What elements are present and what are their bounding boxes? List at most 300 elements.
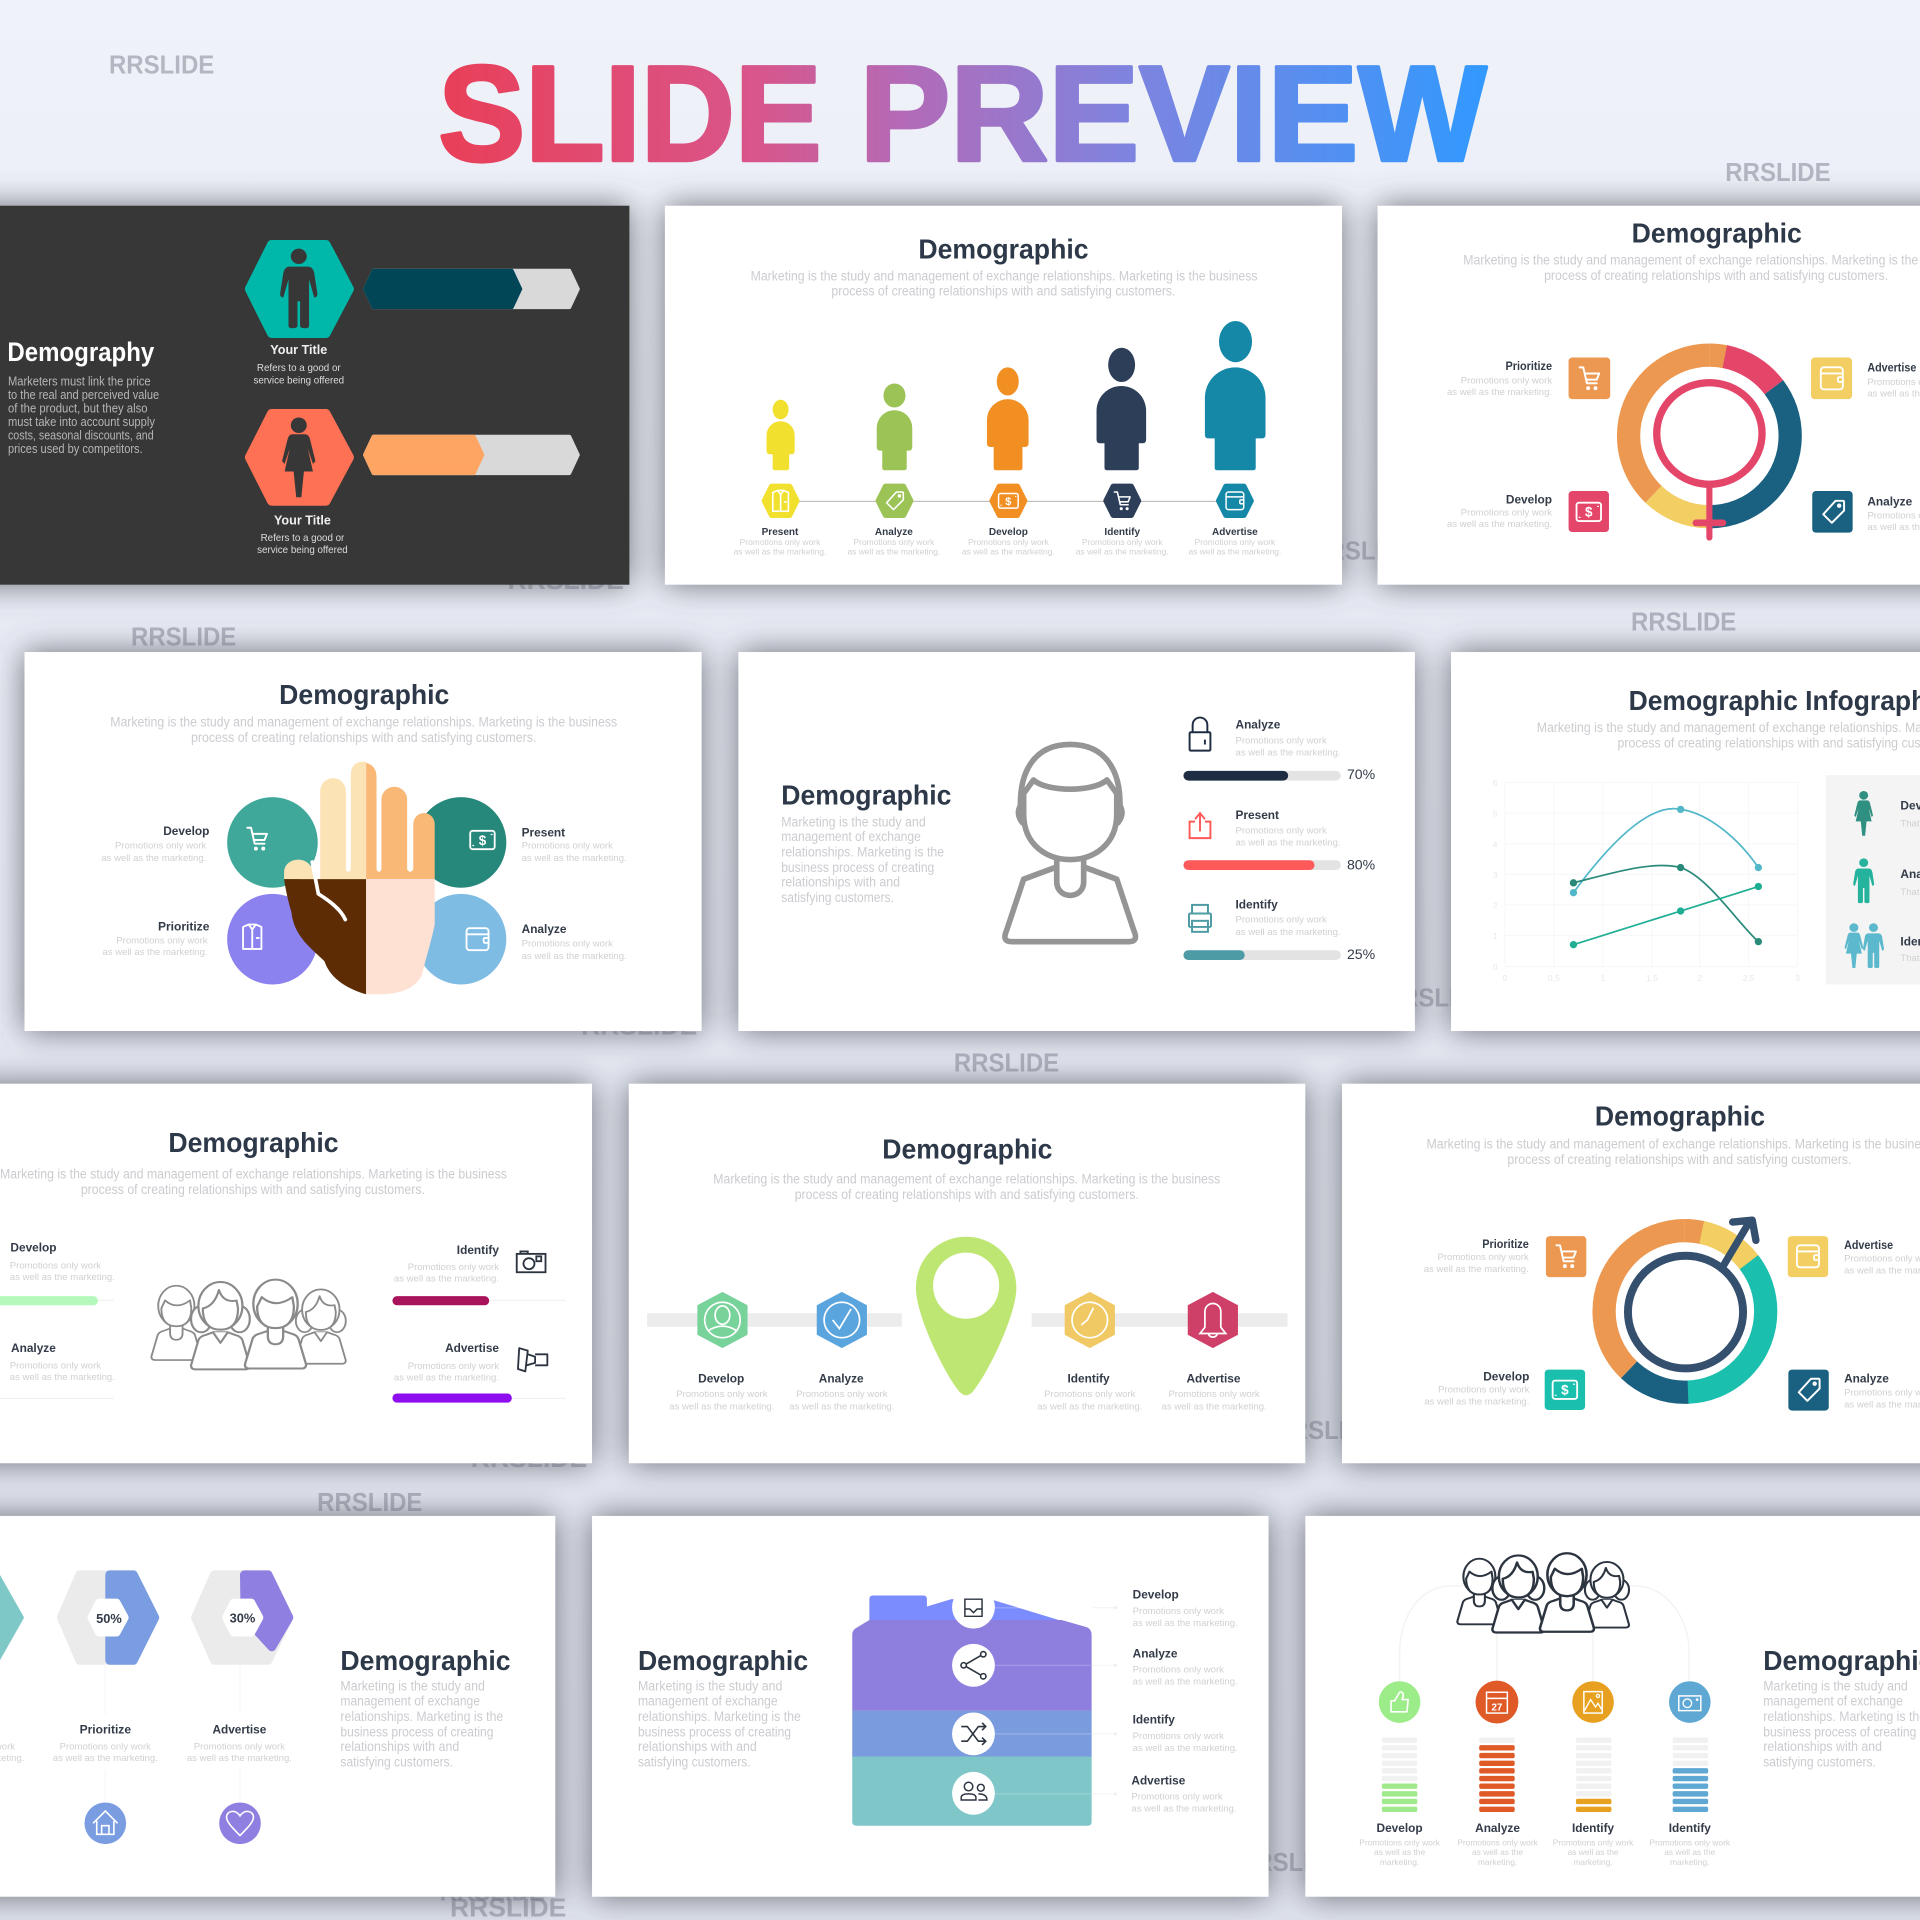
labels: Promotions only work xyxy=(1133,1731,1224,1742)
chart: line chart: 1.5 xyxy=(1646,973,1658,983)
connector lines xyxy=(105,1664,240,1801)
labels: as well as the xyxy=(1374,1847,1425,1857)
chart: line chart: 6 xyxy=(1493,778,1498,788)
labels: Promotions only work xyxy=(116,935,208,946)
progress: Analyze 70%: Promotions only work xyxy=(1236,735,1327,746)
icon: wallet hexagon xyxy=(1218,486,1251,516)
bar stack: Identify high xyxy=(1673,1738,1708,1812)
labels: Promotions only work xyxy=(1438,1252,1529,1263)
watermarks: RRSLIDE xyxy=(109,51,214,79)
icon: image xyxy=(1572,1681,1614,1723)
labels: as well as the marketing. xyxy=(187,1753,292,1764)
chart: line chart: 2.5 xyxy=(1743,973,1755,983)
icon: shuffle xyxy=(952,1712,995,1755)
icon: wallet tile xyxy=(1788,1236,1828,1277)
icon: users xyxy=(952,1772,995,1815)
panel: location pin slide xyxy=(629,1084,1305,1463)
labels: Develop xyxy=(1506,492,1552,506)
text block: paragraph: relationships. Marketing is the xyxy=(781,845,944,860)
labels: as well as the xyxy=(1567,1847,1619,1857)
labels: Promotions only work xyxy=(968,537,1049,547)
icon: mars symbol xyxy=(1628,1220,1756,1368)
chart: line chart: 0.5 xyxy=(1548,973,1560,983)
labels: Develop xyxy=(1483,1370,1529,1384)
progress: Analyze 70%: Analyze xyxy=(1236,718,1281,732)
labels: Promotions only work xyxy=(796,1389,888,1400)
labels xyxy=(1131,1588,1238,1815)
labels: Present xyxy=(762,527,799,538)
chart: line chart: 4 xyxy=(1493,839,1498,849)
icon: thumbs up xyxy=(1379,1681,1420,1723)
labels: Advertise xyxy=(212,1722,267,1736)
watermarks: RRSLIDE xyxy=(317,1489,422,1517)
icon: dollar xyxy=(470,831,495,849)
panel: line chart slide xyxy=(1451,652,1920,1031)
labels: as well as the marketing. xyxy=(522,951,627,962)
labels: Advertise xyxy=(1186,1371,1241,1385)
chart: ascending people xyxy=(767,321,1266,470)
labels: Analyze xyxy=(819,1371,864,1385)
text block: paragraph: management of exchange xyxy=(340,1694,480,1709)
text block: paragraph: management of exchange xyxy=(1763,1694,1903,1709)
labels: Develop xyxy=(163,824,209,838)
labels: marketing. xyxy=(1380,1857,1419,1867)
labels: Promotions only work xyxy=(1133,1606,1224,1617)
labels: as well as the marketing. xyxy=(101,853,206,864)
text block: paragraph: business process of creating xyxy=(638,1724,791,1739)
panel: legend xyxy=(1826,775,1920,984)
chart: line chart: 3 xyxy=(1493,870,1498,880)
labels: as well as the marketing. xyxy=(1131,1804,1236,1815)
labels: as well as the xyxy=(1664,1847,1716,1857)
circles behind hand xyxy=(227,797,506,984)
title xyxy=(438,37,1487,189)
text block: paragraph: relationships. Marketing is the xyxy=(638,1709,801,1724)
text block: paragraph xyxy=(638,1678,801,1769)
labels: as well as the marketing. xyxy=(1188,547,1281,557)
text block: paragraph: management of exchange xyxy=(638,1694,778,1709)
labels: as well as the marketing. xyxy=(1447,519,1552,530)
labels: Promotions only work xyxy=(1649,1837,1731,1847)
labels: Promotions only work xyxy=(1359,1837,1441,1847)
labels: as well as the marketing. xyxy=(734,547,826,557)
icon: location pin xyxy=(916,1237,1016,1395)
text block: paragraph: relationships with and xyxy=(638,1739,757,1754)
labels xyxy=(101,824,627,962)
chart: line chart: 2 xyxy=(1697,973,1702,983)
icon: inbox xyxy=(952,1586,995,1629)
panel: male donut slide xyxy=(1342,1084,1920,1463)
text block: subtitle xyxy=(0,1167,507,1197)
progress: Present 80%: as well as the marketing. xyxy=(1236,838,1341,849)
icon: cart hexagon xyxy=(1106,486,1139,516)
labels: Analyze xyxy=(522,922,567,936)
progress: Identify 25% xyxy=(1183,898,1376,962)
watermarks: RRSLIDE xyxy=(1310,538,1416,566)
labels: Promotions only work xyxy=(1168,1389,1260,1400)
text block: subtitle: Marketing is the study and management of exchange relationships. Marketing is the business xyxy=(110,715,617,730)
text block: subtitle xyxy=(713,1171,1220,1202)
icon: female hexagon xyxy=(250,414,349,501)
illustration: people group xyxy=(151,1280,346,1369)
icon: couple legend xyxy=(1844,923,1884,968)
labels: Identify xyxy=(1669,1821,1711,1835)
heading: Demographic xyxy=(781,779,951,810)
labels: Develop xyxy=(698,1371,744,1385)
timeline rails xyxy=(647,1313,1288,1327)
labels: Promotions only work xyxy=(1438,1385,1530,1396)
panel: person outline slide xyxy=(738,652,1415,1031)
icon: dollar: $ xyxy=(479,833,487,848)
text block: demography description: Marketers must link the price xyxy=(8,374,151,389)
text block: paragraph xyxy=(781,815,944,905)
labels: Prioritize xyxy=(1506,359,1552,373)
progress: Identify 25%: 25% xyxy=(1347,946,1376,962)
progress: Analyze: Promotions only work xyxy=(10,1360,101,1371)
labels: Prioritize xyxy=(80,1722,131,1736)
labels: marketing. xyxy=(1573,1857,1613,1867)
chart: line chart: 2 xyxy=(1493,901,1498,911)
progress: Develop: as well as the marketing. xyxy=(10,1272,115,1283)
labels: as well as the marketing. xyxy=(1133,1743,1238,1754)
icon: shirt hexagon xyxy=(764,486,797,516)
watermarks: RRSLIDE xyxy=(471,1445,587,1473)
icon: camera xyxy=(517,1251,546,1272)
text block: subtitle: process of creating relationships with and satisfying customers. xyxy=(795,1187,1139,1202)
chart: 50% hexagon: 50% xyxy=(96,1611,122,1626)
chart: line chart: 1 xyxy=(1493,931,1498,941)
icon: cart tile xyxy=(1546,1236,1586,1277)
labels: Advertise xyxy=(1131,1774,1186,1788)
timeline connector xyxy=(780,500,1234,502)
caption: female title: Your Title xyxy=(274,514,331,528)
labels xyxy=(53,1722,292,1764)
labels: marketing. xyxy=(1478,1857,1517,1867)
heading: Demographic xyxy=(1632,217,1802,248)
icon: tag hexagon xyxy=(878,486,911,516)
labels: Promotions only work xyxy=(1553,1837,1634,1847)
labels: Develop xyxy=(989,527,1028,538)
panel: group bars slide xyxy=(1305,1516,1920,1897)
text block: demography description: must take into account supply xyxy=(8,414,155,429)
labels: Promotions only work xyxy=(1195,537,1276,547)
labels: as well as the marketing. xyxy=(1076,547,1169,557)
text block: subtitle: process of creating relationships with and satisfying customers. xyxy=(1544,268,1888,283)
text block: paragraph: relationships with and xyxy=(1763,1739,1882,1754)
bar stack: Analyze xyxy=(1479,1738,1515,1812)
progress: Analyze xyxy=(0,1341,115,1398)
progress: Advertise: Promotions only work xyxy=(408,1361,499,1372)
labels xyxy=(1359,1821,1731,1867)
progress: Identify: Promotions only work xyxy=(408,1262,499,1273)
text block: subtitle: Marketing is the study and management of exchange relationships. Marketing is the business xyxy=(0,1167,507,1182)
text block: paragraph: relationships. Marketing is the xyxy=(340,1709,503,1724)
caption: male title: Refers to a good or xyxy=(257,363,341,374)
progress: Advertise xyxy=(392,1341,566,1403)
watermarks: RRSLIDE xyxy=(1725,159,1831,187)
progress: Analyze 70%: as well as the marketing. xyxy=(1236,748,1341,759)
text block: subtitle: process of creating relationships with and satisfying customers. xyxy=(1507,1152,1851,1167)
caption: male title: service being offered xyxy=(253,375,344,386)
labels: Promotions only work xyxy=(740,537,821,547)
icon: cart xyxy=(247,828,267,850)
heading: Demographic xyxy=(882,1133,1052,1164)
progress: Identify xyxy=(392,1243,566,1305)
icon: check hexagon xyxy=(817,1292,867,1348)
text block: paragraph xyxy=(340,1678,503,1769)
labels: Promotions only work xyxy=(1133,1664,1224,1675)
labels xyxy=(1447,359,1920,533)
leader lines xyxy=(994,1606,1117,1795)
text block: paragraph: relationships with and xyxy=(781,875,900,890)
labels: as well as the xyxy=(1472,1847,1523,1857)
labels: Identify xyxy=(1067,1371,1110,1385)
progress: Identify 25%: as well as the marketing. xyxy=(1236,927,1341,938)
progress: Analyze 70% xyxy=(1183,718,1376,782)
text block: paragraph: satisfying customers. xyxy=(340,1754,453,1769)
text block: subtitle: Marketing is the study and management of exchange relationships. Marketing is the business xyxy=(751,268,1258,283)
panel: female donut slide xyxy=(1378,206,1920,585)
icon: share nodes xyxy=(952,1644,995,1687)
text block: paragraph: business process of creating xyxy=(340,1724,493,1739)
labels: as well as the marketing. xyxy=(1162,1401,1267,1412)
legend labels xyxy=(1900,798,1920,964)
caption: female title: service being offered xyxy=(257,545,348,556)
labels: Promotions only work xyxy=(115,841,207,852)
watermarks: RRSLIDE xyxy=(131,623,236,651)
heading: Demographic xyxy=(638,1645,808,1676)
watermarks: RRSLIDE xyxy=(581,1013,697,1041)
progress: Present 80%: Promotions only work xyxy=(1236,825,1327,836)
icon: wallet xyxy=(467,928,489,950)
labels: as well as the marketing. xyxy=(1424,1396,1529,1407)
text block: paragraph: Marketing is the study and xyxy=(340,1678,485,1693)
icon: male hexagon xyxy=(250,245,349,333)
labels: Present xyxy=(522,825,565,839)
icon: share xyxy=(1190,813,1210,838)
progress: Analyze: as well as the marketing. xyxy=(10,1372,115,1383)
illustration: layered house xyxy=(852,1596,1092,1826)
icon: heart xyxy=(219,1802,261,1844)
labels: Develop xyxy=(1377,1821,1423,1835)
icon: dollar tile: $ xyxy=(1585,505,1593,520)
text block: paragraph: management of exchange xyxy=(781,829,921,844)
progress: Identify: as well as the marketing. xyxy=(394,1273,499,1284)
watermarks: RRSLIDE xyxy=(508,567,624,595)
labels: Promotions only work xyxy=(1457,1837,1539,1847)
heading: Demographic xyxy=(1595,1100,1765,1131)
labels xyxy=(734,527,1281,557)
chart: line chart: 0 xyxy=(1503,973,1508,983)
chart: line chart xyxy=(1493,778,1800,983)
panel: hand slide xyxy=(24,652,702,1031)
labels: Promotions only work xyxy=(522,939,613,950)
icon: clock hexagon xyxy=(1065,1292,1115,1348)
icon: camera xyxy=(1669,1681,1711,1723)
caption: female title xyxy=(257,514,348,556)
text block: paragraph: Marketing is the study and xyxy=(1763,1678,1908,1693)
progress: Develop: Develop xyxy=(10,1240,57,1254)
panel: group progress slide xyxy=(0,1084,592,1463)
labels: Advertise xyxy=(1212,527,1258,538)
title: PREVIEW xyxy=(860,37,1487,189)
text block: paragraph xyxy=(1763,1678,1920,1769)
labels: Promotions only work xyxy=(1044,1389,1136,1400)
labels: Promotions only work xyxy=(1461,375,1552,386)
labels: as well as the marketing. xyxy=(1424,1264,1529,1275)
text block: demography description: prices used by competitors. xyxy=(8,441,143,456)
illustration: people group xyxy=(1457,1553,1629,1632)
labels: as well as the marketing. xyxy=(962,547,1055,557)
chart: line chart: 5 xyxy=(1493,809,1498,819)
chart: donut xyxy=(1629,355,1790,517)
text block: paragraph: Marketing is the study and xyxy=(781,815,926,830)
labels: Analyze xyxy=(1475,1821,1520,1835)
labels: Promotions only work xyxy=(854,537,935,547)
chart: line chart: 0 xyxy=(1493,962,1498,972)
watermarks: RRSLIDE xyxy=(1384,985,1489,1013)
labels xyxy=(1424,1237,1920,1410)
icon: bell hexagon xyxy=(1188,1292,1238,1348)
caption: male title xyxy=(253,343,344,386)
labels: as well as the marketing. xyxy=(1133,1618,1238,1629)
text block: subtitle: process of creating relationships with and satisfying customers. xyxy=(831,284,1176,299)
text block: demography description: costs, seasonal discounts, and xyxy=(8,428,154,443)
text block: paragraph: satisfying customers. xyxy=(1763,1754,1876,1769)
labels: Promotions only work xyxy=(522,841,613,852)
labels: Advertise xyxy=(1844,1238,1893,1252)
icon: printer xyxy=(1189,905,1211,932)
text block: subtitle xyxy=(1427,1137,1920,1167)
labels: as well as the marketing. xyxy=(53,1753,158,1764)
partial teal hexagon xyxy=(0,1572,22,1663)
icon: tag tile xyxy=(1812,491,1853,533)
labels: Identify xyxy=(1104,527,1140,538)
icon: dollar hexagon xyxy=(992,486,1025,516)
icon: venus symbol xyxy=(1657,383,1762,538)
chart: line chart: 1 xyxy=(1600,973,1605,983)
heading: Demography: Demography xyxy=(7,337,154,367)
icon: dollar hexagon: $ xyxy=(1005,496,1011,508)
text block: demography description: to the real and perceived value xyxy=(8,387,159,402)
labels: Promotions only work xyxy=(60,1741,151,1752)
icon: house xyxy=(84,1802,126,1844)
text block: subtitle: process of creating relationships with and satisfying customers. xyxy=(81,1182,425,1197)
bar stack: Identify low xyxy=(1576,1738,1611,1812)
progress: Present 80%: 80% xyxy=(1347,856,1376,872)
labels: Promotions only work xyxy=(1131,1792,1223,1803)
legend labels: That xyxy=(1900,953,1920,964)
chart: line chart: 3 xyxy=(1795,973,1800,983)
watermarks: RRSLIDE xyxy=(1273,1417,1379,1445)
bar stack: Develop xyxy=(1382,1738,1417,1812)
labels: Promotions only work xyxy=(1082,537,1163,547)
labels: as well as the marketing. xyxy=(102,947,208,958)
partial label xyxy=(0,1741,24,1764)
caption: male title: Your Title xyxy=(270,343,327,357)
panel: dark demography slide xyxy=(0,206,629,585)
icon: shirt xyxy=(243,924,261,949)
panel: hexagon percent slide xyxy=(0,1516,555,1897)
icon: wallet tile xyxy=(1811,358,1852,399)
progress: Identify 25%: Promotions only work xyxy=(1236,915,1327,926)
watermarks: RRSLIDE xyxy=(1631,609,1736,637)
labels: as well as the marketing. xyxy=(789,1401,894,1412)
progress: Advertise: Advertise xyxy=(445,1341,499,1355)
labels: Analyze xyxy=(875,527,913,538)
labels: Promotions only work xyxy=(1461,508,1552,519)
icon: dollar tile xyxy=(1569,491,1609,532)
connector lines xyxy=(1400,1586,1689,1681)
icon: tag tile xyxy=(1788,1370,1829,1411)
progress: Identify: Identify xyxy=(457,1243,499,1257)
panel: people height slide xyxy=(665,206,1342,585)
progress: Present 80%: Present xyxy=(1236,808,1279,822)
watermarks: RRSLIDE xyxy=(1238,1849,1343,1877)
text block: paragraph: satisfying customers. xyxy=(638,1754,751,1769)
labels: marketing. xyxy=(1670,1857,1709,1867)
text block: subtitle: process of creating relationships with and satisfying customers. xyxy=(191,730,536,745)
labels: Promotions only work xyxy=(194,1741,285,1752)
labels: as well as the marketing. xyxy=(847,547,940,557)
progress chevron: male xyxy=(365,271,578,307)
chart: donut xyxy=(1604,1231,1766,1392)
watermarks: RRSLIDE xyxy=(954,1049,1059,1077)
text block: subtitle xyxy=(110,715,617,745)
title: SLIDE xyxy=(438,37,822,189)
icon: dollar tile: $ xyxy=(1561,1383,1569,1398)
progress: Analyze 70%: 70% xyxy=(1347,766,1376,782)
labels: as well as the marketing. xyxy=(1447,387,1552,398)
chart: 30% hexagon: 30% xyxy=(230,1610,256,1625)
labels: Analyze xyxy=(1844,1371,1889,1385)
icon: lock xyxy=(1190,718,1210,751)
chart: 30% hexagon xyxy=(195,1575,289,1660)
chart: 50% hexagon xyxy=(61,1575,155,1660)
illustration: multicolor hand xyxy=(284,762,435,994)
text block: demography description: of the product, but they also xyxy=(8,401,148,416)
labels: Identify xyxy=(1133,1712,1175,1726)
labels: Advertise xyxy=(1867,361,1917,375)
icon: megaphone xyxy=(518,1348,547,1371)
icon: dollar tile xyxy=(1545,1370,1585,1410)
icon: calendar: 27 xyxy=(1491,1703,1503,1714)
text block: subtitle xyxy=(1537,720,1920,751)
labels: as well as the marketing. xyxy=(669,1401,774,1412)
labels: Prioritize xyxy=(158,920,210,934)
labels: Prioritize xyxy=(1482,1237,1529,1251)
text block: paragraph: satisfying customers. xyxy=(781,890,894,905)
labels: as well as the marketing. xyxy=(1133,1676,1238,1687)
heading: Demographic xyxy=(279,679,449,710)
progress: Advertise: as well as the marketing. xyxy=(394,1373,499,1384)
progress chevron: female xyxy=(365,437,578,473)
icon: person hexagon xyxy=(697,1292,748,1348)
icon: man legend xyxy=(1853,858,1874,903)
labels: Analyze xyxy=(1867,495,1913,509)
text block: subtitle: Marketing is the study and management of exchange relationships. Marketing is the business xyxy=(713,1171,1220,1186)
progress: Analyze: Analyze xyxy=(11,1341,56,1355)
text block: paragraph: relationships with and xyxy=(340,1739,459,1754)
labels: as well as the marketing. xyxy=(522,853,627,864)
text block: subtitle xyxy=(1463,252,1920,283)
text block: subtitle xyxy=(751,268,1258,299)
labels: Develop xyxy=(1133,1588,1179,1602)
progress: Present 80% xyxy=(1183,808,1376,872)
panel: house slide xyxy=(592,1516,1269,1897)
caption: female title: Refers to a good or xyxy=(261,533,345,544)
labels: Promotions only work xyxy=(676,1389,768,1400)
